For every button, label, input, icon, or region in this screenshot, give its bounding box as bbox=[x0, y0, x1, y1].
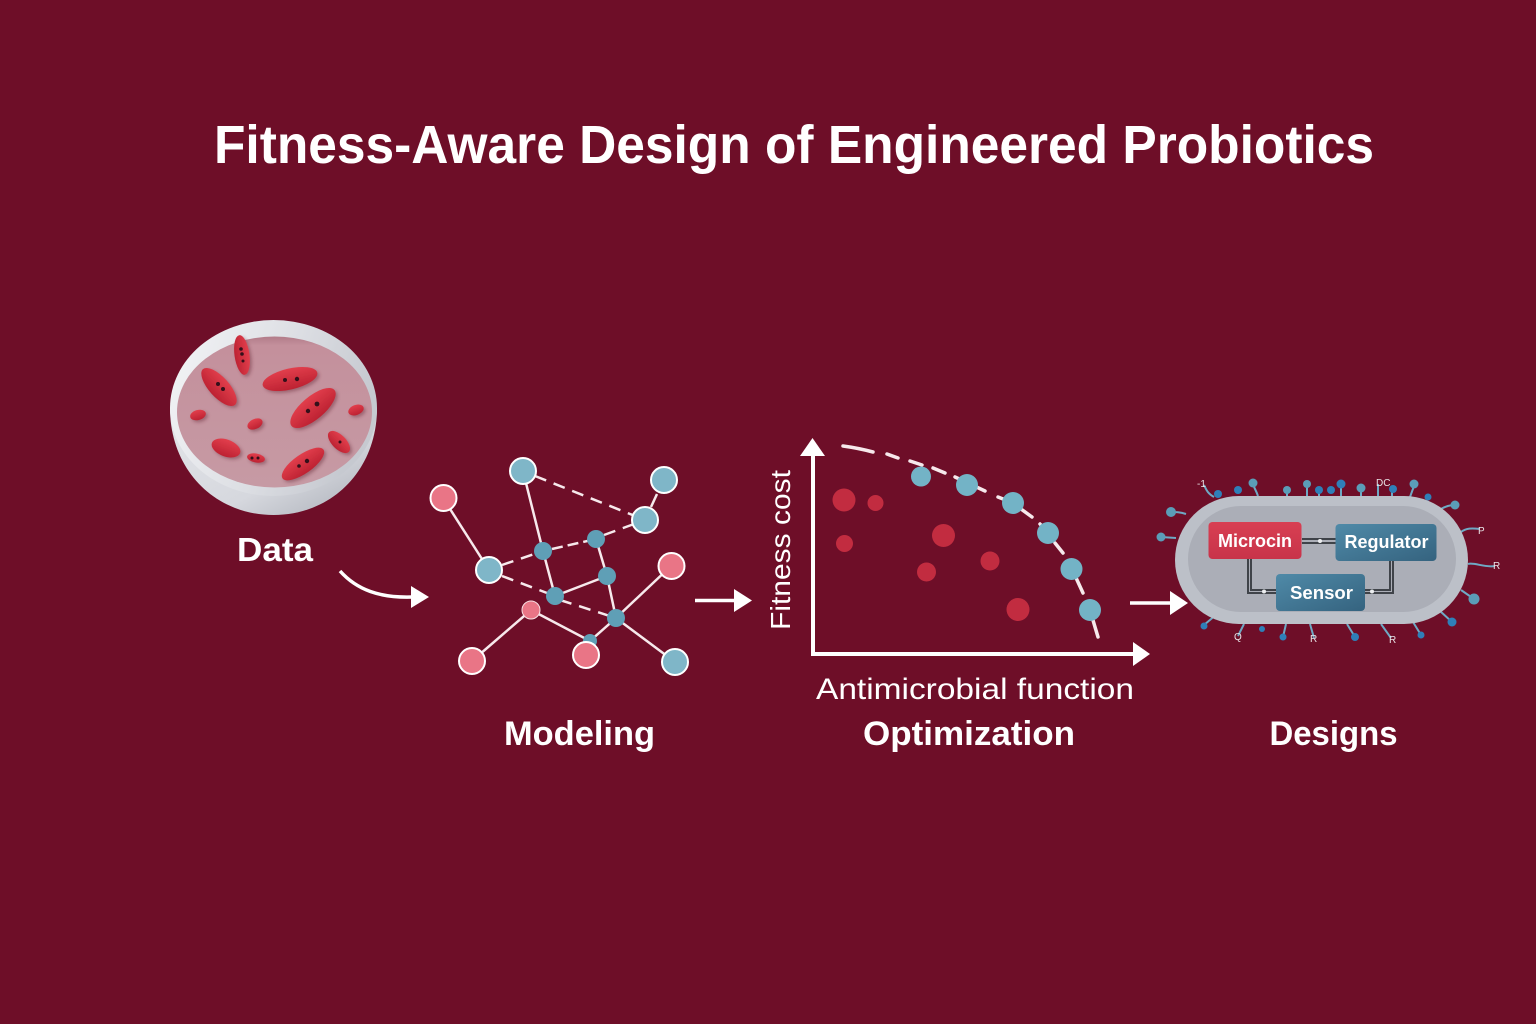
box: Sensor bbox=[1276, 574, 1365, 611]
tiny appendage labels: R bbox=[1310, 634, 1317, 645]
axis label: Fitness cost: Fitness cost bbox=[765, 470, 796, 630]
pink nodes bbox=[430, 485, 684, 674]
dominated designs bbox=[832, 488, 1030, 621]
pareto optimal designs bbox=[911, 466, 1101, 621]
small pink node bbox=[522, 601, 540, 619]
panel: optimization chart bbox=[765, 438, 1150, 706]
tiny appendage labels bbox=[1197, 478, 1500, 646]
label: Data: Data bbox=[237, 531, 314, 568]
box: Microcin: Microcin bbox=[1218, 531, 1292, 551]
icon: culture medium bbox=[177, 336, 372, 488]
label: Designs: Designs bbox=[1270, 715, 1398, 753]
panel: data petri dish bbox=[170, 320, 377, 515]
circuit connectors bbox=[1248, 539, 1393, 593]
cell cytoplasm bbox=[1188, 506, 1456, 612]
box: Sensor: Sensor bbox=[1290, 583, 1353, 603]
network edges bbox=[443, 471, 675, 662]
icon: petri dish rim bbox=[170, 320, 377, 496]
connector junctions bbox=[1262, 539, 1374, 594]
arrow: modeling to optimization bbox=[695, 589, 752, 612]
panel: engineered probiotic cell bbox=[1156, 478, 1500, 646]
title: Fitness-Aware Design of Engineered Probiotics bbox=[214, 115, 1374, 175]
pareto front curve bbox=[843, 446, 1098, 637]
tiny appendage labels: R bbox=[1493, 561, 1500, 572]
large blue nodes bbox=[476, 458, 688, 675]
box: Microcin bbox=[1208, 522, 1302, 559]
box: Regulator: Regulator bbox=[1344, 532, 1428, 552]
tiny appendage labels: P bbox=[1478, 526, 1485, 537]
axis label: Antimicrobial function: Antimicrobial function bbox=[816, 673, 1134, 706]
panel: modeling network bbox=[430, 458, 688, 675]
icon: bacteria dark spots bbox=[216, 347, 342, 468]
label: Modeling: Modeling bbox=[504, 715, 655, 753]
small hub nodes bbox=[534, 530, 625, 648]
tiny appendage labels: DC bbox=[1376, 478, 1390, 489]
arrow: optimization to designs bbox=[1130, 591, 1188, 615]
arrow: data to modeling bbox=[340, 571, 429, 608]
icon: bacteria colonies bbox=[189, 334, 365, 486]
icon: petri dish base bbox=[170, 408, 377, 515]
label: Optimization: Optimization bbox=[863, 715, 1075, 753]
tiny appendage labels: Q bbox=[1234, 632, 1242, 643]
cell membrane bbox=[1175, 496, 1468, 624]
tiny appendage labels: R bbox=[1389, 635, 1396, 646]
cell surface appendages bbox=[1161, 484, 1495, 638]
box: Regulator bbox=[1336, 524, 1436, 561]
tiny appendage labels: -1 bbox=[1197, 479, 1206, 490]
chart axes bbox=[800, 438, 1150, 666]
